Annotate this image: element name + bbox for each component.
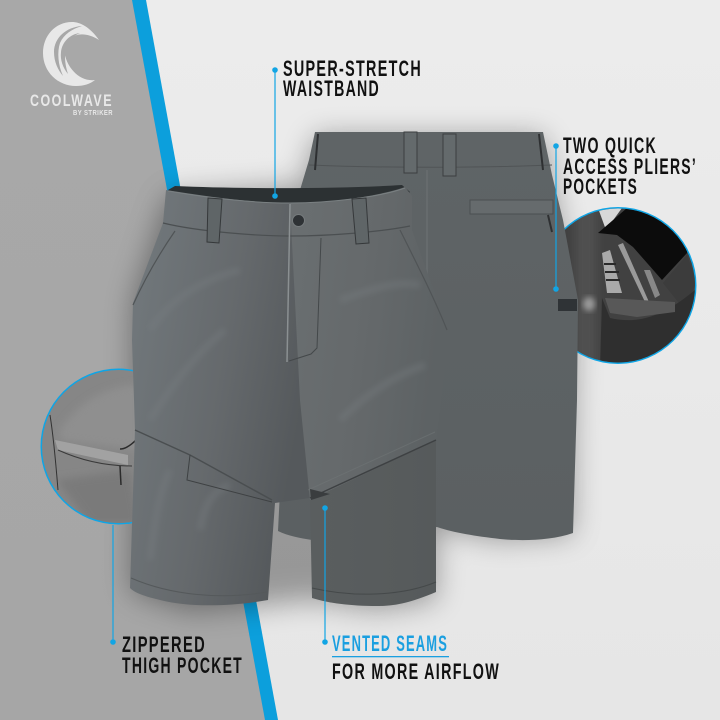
callout: thigh pocket: THIGH POCKET <box>122 653 243 678</box>
background gray panel <box>0 0 266 720</box>
side tab <box>558 299 577 311</box>
fly <box>287 204 290 362</box>
waistband seam <box>163 223 410 236</box>
hems <box>131 578 267 596</box>
pocket stitching <box>133 231 175 305</box>
back belt loops <box>404 132 456 176</box>
callout: thigh pocket: ZIPPERED <box>122 632 206 657</box>
pliers pocket detail circle <box>564 207 696 364</box>
pliers <box>602 243 660 302</box>
left leg <box>130 190 310 605</box>
callout: pliers pockets <box>553 133 697 292</box>
front view shorts <box>130 185 447 606</box>
callout: pliers pockets: POCKETS <box>563 174 638 199</box>
belt loops <box>207 198 369 244</box>
fabric wrinkles <box>150 270 425 560</box>
garment shadows <box>130 136 575 612</box>
callout: thigh pocket <box>110 525 243 678</box>
logo: coolwave: BY STRIKER <box>73 110 113 117</box>
callout: waistband: WAISTBAND <box>283 76 380 101</box>
callout: waistband: SUPER-STRETCH <box>283 56 422 81</box>
callout: vented seams <box>322 505 500 684</box>
callout: pliers pockets: TWO QUICK <box>563 133 657 158</box>
back welt pocket <box>470 200 553 214</box>
callout: waistband <box>272 56 422 199</box>
icon: wave <box>43 22 99 86</box>
button <box>292 214 304 226</box>
zipper pocket detail circle <box>40 368 135 524</box>
right lower leg <box>310 440 436 606</box>
logo: coolwave: COOLWAVE <box>30 92 113 110</box>
callout: vented seams: FOR MORE AIRFLOW <box>332 659 500 684</box>
right panel <box>290 187 447 500</box>
blue diagonal band <box>132 0 278 720</box>
callout: vented seams: VENTED SEAMS <box>332 631 448 656</box>
leg seams <box>135 430 272 500</box>
logo: coolwave <box>30 22 113 117</box>
inner waistband <box>168 185 410 206</box>
back view shorts <box>278 132 578 540</box>
